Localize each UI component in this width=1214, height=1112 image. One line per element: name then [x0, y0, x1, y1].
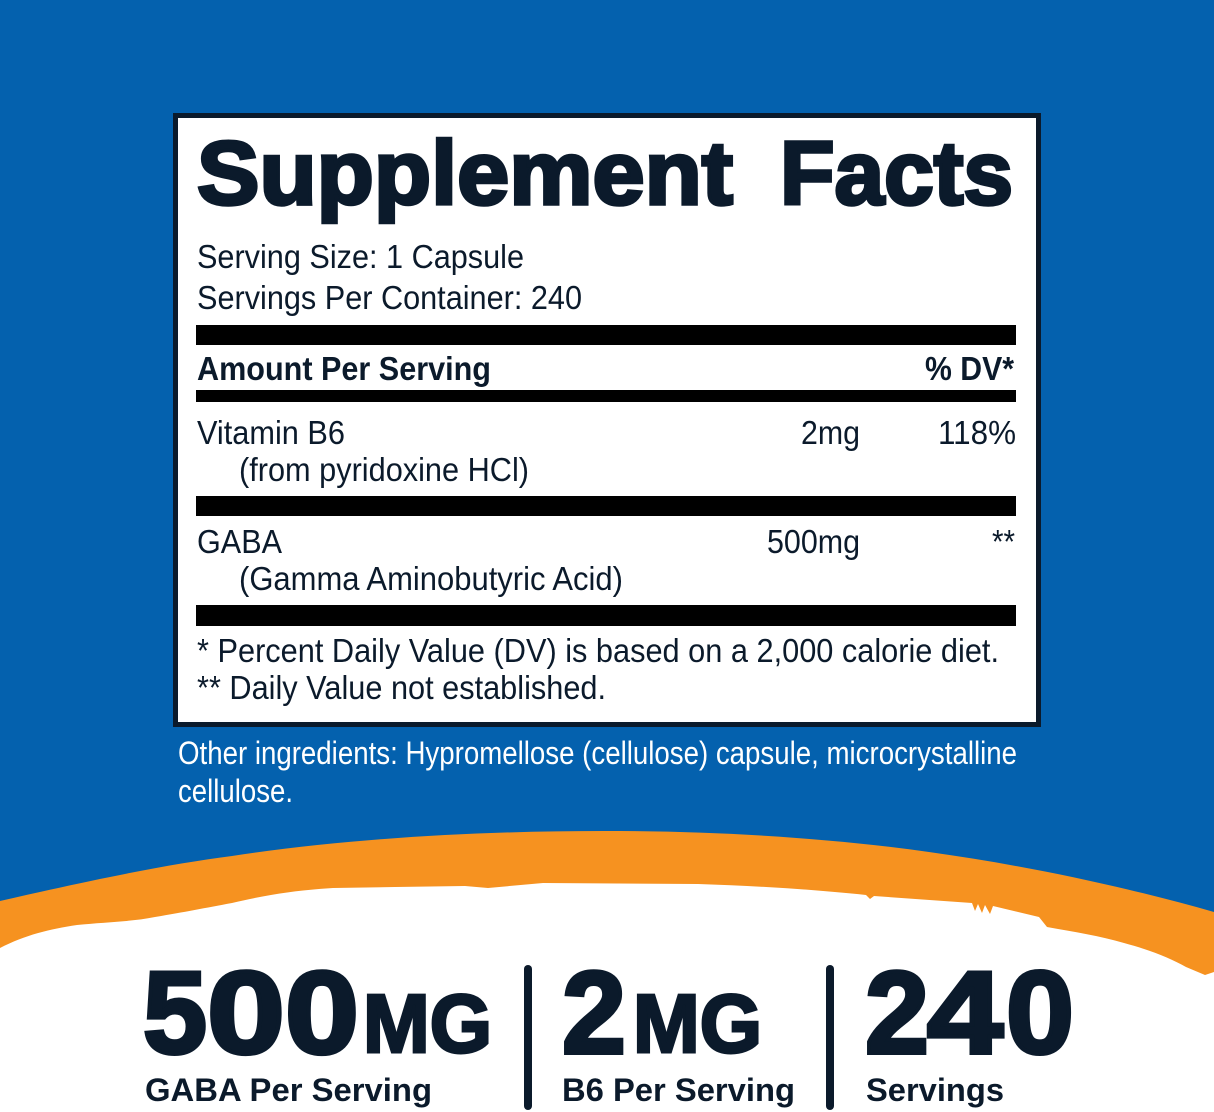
thick rule: [196, 325, 1016, 345]
row: vitamin B6: 2mg: [801, 414, 860, 451]
value: 2: 2: [562, 947, 626, 1078]
footnotes: ** Daily Value not established.: [197, 669, 606, 706]
serving information: Servings Per Container: 240: [197, 279, 582, 316]
value: 500: 5: [143, 947, 207, 1078]
table header: Amount Per Serving: [197, 350, 491, 387]
divider: [524, 965, 532, 1110]
orange brush arc: [0, 831, 1214, 1000]
other ingredients text: [178, 735, 1017, 809]
header rule: [196, 390, 1016, 402]
serving information: Serving Size: 1 Capsule: [197, 238, 524, 275]
row rule: [196, 496, 1016, 516]
footnotes: * Percent Daily Value (DV) is based on a 2,000 calorie diet.: [197, 632, 999, 669]
panel: supplement facts label: [176, 116, 1038, 724]
stat: 500mg GABA per serving: [143, 947, 492, 1108]
row: GABA: **: [992, 523, 1015, 560]
row: GABA: [197, 523, 1015, 597]
divider: [826, 965, 834, 1110]
other ingredients text: cellulose.: [178, 773, 293, 809]
heading: supplement facts: Facts: [780, 124, 1013, 224]
row: vitamin B6: [197, 414, 1016, 488]
value: 500: [143, 947, 359, 1078]
footnotes: [197, 632, 999, 706]
other ingredients text: Other ingredients: Hypromellose (cellulose) capsule, microcrystalline: [178, 735, 1017, 771]
heading: supplement facts: Supplement: [197, 124, 733, 224]
white bottom area: [0, 883, 1214, 1112]
value: 240: 4: [927, 947, 1003, 1078]
value: 240: 0: [1006, 947, 1074, 1078]
caption: GABA Per Serving: [145, 1072, 432, 1108]
row: vitamin B6: (from pyridoxine HCl): [239, 451, 529, 488]
value: 500: 0: [207, 947, 285, 1078]
row: GABA: (Gamma Aminobutyric Acid): [239, 560, 623, 597]
value: 240: 2: [865, 947, 929, 1078]
label box: [176, 116, 1038, 724]
value: 500: 0: [285, 947, 359, 1078]
row: GABA: GABA: [197, 523, 282, 560]
unit: MG: MG: [363, 977, 492, 1070]
serving information: [197, 238, 582, 316]
stat: 2mg B6 per serving: [562, 947, 795, 1108]
unit: MG: MG: [633, 977, 762, 1070]
caption: B6 Per Serving: [562, 1072, 795, 1108]
row: vitamin B6: 118%: [938, 414, 1016, 451]
value: 240: [865, 947, 1074, 1078]
bottom rule: [196, 605, 1016, 626]
stat: 240 servings: [865, 947, 1074, 1108]
table header: [197, 350, 1014, 387]
heading: supplement facts: [197, 124, 1013, 224]
caption: Servings: [866, 1072, 1004, 1108]
row: GABA: 500mg: [767, 523, 860, 560]
row: vitamin B6: Vitamin B6: [197, 414, 345, 451]
table header: % DV*: [925, 350, 1014, 387]
